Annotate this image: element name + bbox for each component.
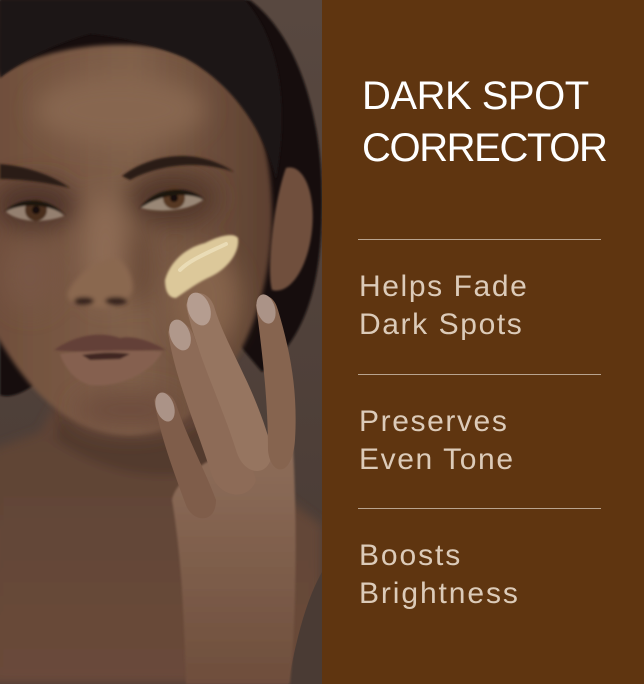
hair back — [0, 0, 322, 396]
right eyebrow — [122, 156, 234, 180]
benefit: boosts brightness: Brightness — [359, 577, 520, 610]
hand and fingers — [152, 289, 296, 684]
cream smear — [165, 235, 238, 298]
divider — [358, 374, 601, 375]
nose — [68, 258, 133, 307]
nails — [183, 289, 215, 329]
shoulders and neck — [0, 380, 322, 684]
benefit: helps fade dark spots: Helps Fade — [359, 270, 528, 303]
panel: product information — [322, 0, 644, 684]
title: CORRECTOR — [362, 126, 606, 170]
divider — [358, 239, 601, 240]
left eyebrow — [0, 164, 70, 188]
title: DARK SPOT — [362, 74, 589, 118]
title — [362, 74, 606, 170]
background — [0, 0, 322, 684]
benefit: preserves even tone: Even Tone — [359, 443, 515, 476]
fingers — [154, 393, 216, 518]
divider — [358, 508, 601, 509]
face — [0, 45, 272, 435]
benefit: helps fade dark spots: Dark Spots — [359, 308, 523, 341]
benefit: boosts brightness: Boosts — [359, 539, 462, 572]
left eye — [4, 199, 66, 221]
clothing strap — [288, 572, 322, 684]
benefit: preserves even tone — [359, 405, 515, 476]
lips — [54, 335, 166, 385]
forehead and cheek light — [0, 75, 239, 430]
benefit: helps fade dark spots — [359, 270, 528, 341]
benefit: preserves even tone: Preserves — [359, 405, 508, 438]
photo: woman applying cream to cheek — [0, 0, 322, 684]
hair front — [0, 0, 282, 180]
benefit: boosts brightness — [359, 539, 520, 610]
ear — [270, 167, 313, 291]
right eye — [139, 187, 205, 211]
